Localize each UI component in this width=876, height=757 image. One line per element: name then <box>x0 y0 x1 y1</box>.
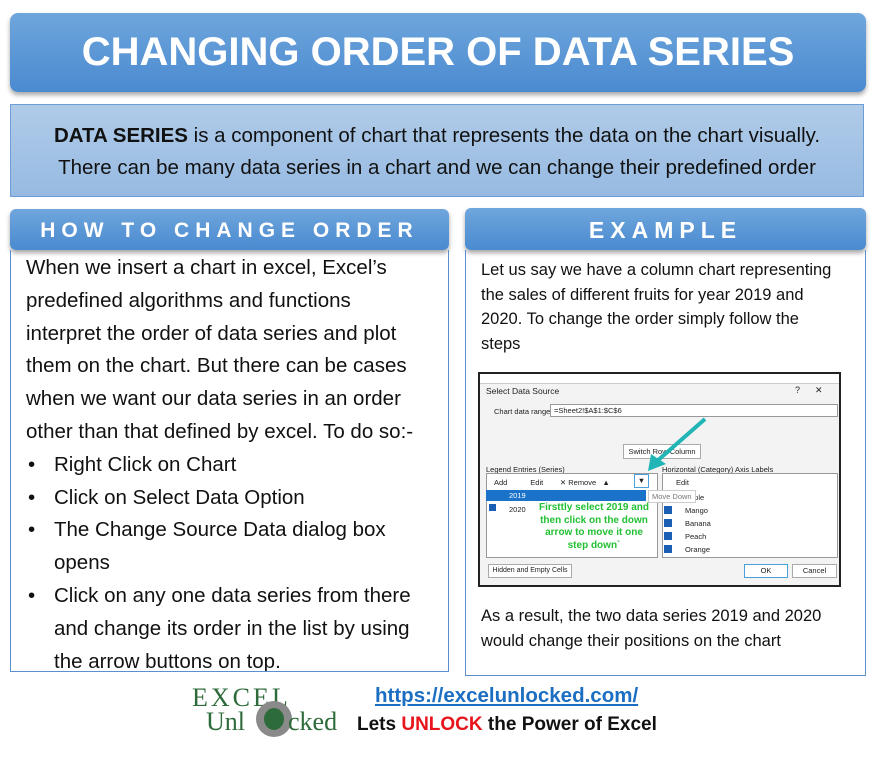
bullet list: the arrow buttons on top. <box>54 650 281 672</box>
bullet list: • <box>28 518 35 541</box>
screenshot: select data source dialog: Mango <box>685 506 708 515</box>
bullet list: opens <box>54 551 110 574</box>
screenshot: select data source dialog: ? ✕ <box>795 385 823 395</box>
bullet list: Click on any one data series from there <box>54 584 411 607</box>
panel: how to change order <box>10 250 449 672</box>
header: how to change order: HOW TO CHANGE ORDER <box>40 219 419 242</box>
result text <box>481 607 821 650</box>
panel: how to change order: interpret the order of data series and plot <box>26 322 396 345</box>
panel: how to change order: when we want our data series in an order <box>26 387 401 410</box>
screenshot: select data source dialog: Hidden and Empty Cells <box>492 567 568 574</box>
screenshot: select data source dialog: Switch Row/Column <box>628 447 696 456</box>
header: how to change order <box>10 209 449 250</box>
screenshot: select data source dialog: Peach <box>685 532 706 541</box>
screenshot: select data source dialog: Horizontal (Category) Axis Labels <box>662 465 773 474</box>
tagline: Lets UNLOCK the Power of Excel <box>357 714 657 735</box>
screenshot: select data source dialog: Banana <box>685 519 711 528</box>
logo: cked <box>288 707 337 736</box>
screenshot: select data source dialog: Legend Entries (Series) <box>486 465 565 474</box>
panel: how to change order: them on the chart. But there can be cases <box>26 354 407 377</box>
screenshot: select data source dialog: Move Down <box>652 492 692 501</box>
bullet list <box>28 453 411 672</box>
title: CHANGING ORDER OF DATA SERIES <box>82 30 794 74</box>
panel: example: the sales of different fruits for year 2019 and <box>481 286 804 304</box>
panel: example: steps <box>481 335 520 353</box>
bullet list: Right Click on Chart <box>54 453 236 476</box>
logo <box>192 683 337 737</box>
screenshot: select data source dialog: Edit <box>676 478 689 487</box>
screenshot: select data source dialog: Select Data Source <box>486 386 559 396</box>
logo: Unl <box>206 707 245 736</box>
header: example: EXAMPLE <box>589 217 742 243</box>
panel: example <box>465 250 866 676</box>
screenshot: select data source dialog: Add Edit ✕ Remove ▲ <box>494 478 610 487</box>
panel: example: 2020. To change the order simply follow the <box>481 310 799 328</box>
screenshot: select data source dialog: Cancel <box>803 566 826 575</box>
result text: would change their positions on the chart <box>481 632 781 650</box>
panel: example: Let us say we have a column chart representing <box>481 261 831 279</box>
result text: As a result, the two data series 2019 and 2020 <box>481 607 821 625</box>
intro text box <box>10 104 864 197</box>
bullet list: • <box>28 584 35 607</box>
title <box>10 13 866 92</box>
bullet list: Click on Select Data Option <box>54 486 305 509</box>
screenshot: select data source dialog: Apple <box>685 493 704 502</box>
bullet list: • <box>28 486 35 509</box>
bullet list: • <box>28 453 35 476</box>
panel: how to change order: When we insert a chart in excel, Excel’s <box>26 256 387 279</box>
logo: EXCEL <box>192 683 291 712</box>
screenshot: select data source dialog: Chart data range: <box>494 407 552 416</box>
url: https://excelunlocked.com/ <box>375 684 638 707</box>
panel: how to change order: predefined algorithms and functions <box>26 289 351 312</box>
screenshot: select data source dialog: =Sheet2!$A$1:$C$6 <box>554 406 622 415</box>
screenshot: select data source dialog: Orange <box>685 545 710 554</box>
header: example <box>465 208 866 250</box>
intro text box: DATA SERIES is a component of chart that represents the data on the chart visually. <box>54 124 820 147</box>
screenshot: select data source dialog: 2020 <box>509 505 526 514</box>
bullet list: The Change Source Data dialog box <box>54 518 386 541</box>
screenshot: select data source dialog: Firsttly select 2019 and then click on the down arrow to move it one step down` <box>539 502 649 550</box>
screenshot: select data source dialog: ▼ <box>638 476 645 485</box>
screenshot: select data source dialog: OK <box>761 566 771 575</box>
intro text box: There can be many data series in a chart and we can change their predefined order <box>58 156 816 179</box>
screenshot: select data source dialog: 2019 <box>509 491 526 500</box>
bullet list: and change its order in the list by using <box>54 617 410 640</box>
screenshot: select data source dialog <box>478 372 841 587</box>
panel: how to change order: other than that defined by excel. To do so:- <box>26 420 413 443</box>
